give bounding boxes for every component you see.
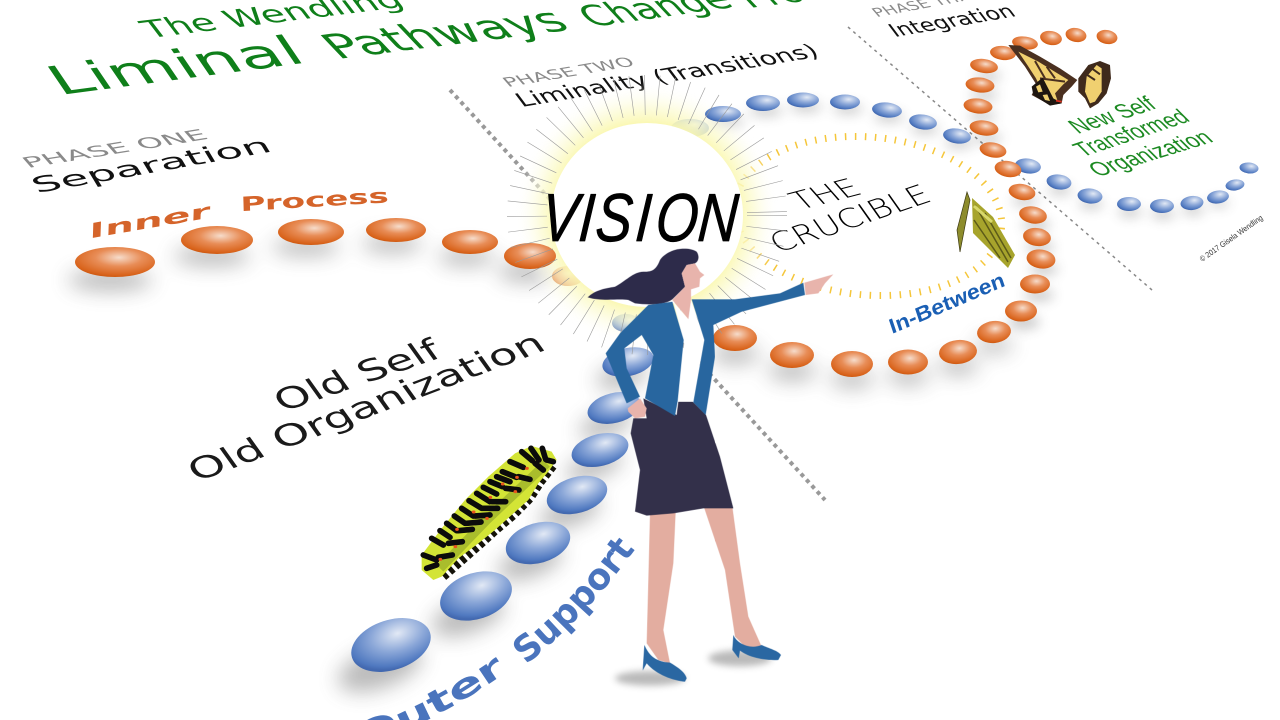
title — [36, 0, 894, 104]
title word: Pathways: Pathways — [310, 0, 579, 67]
crucible: CRUCIBLE — [762, 178, 937, 259]
phase one name: Separation — [26, 132, 276, 198]
beads showing through the rays — [504, 106, 741, 269]
process: Process — [237, 185, 393, 216]
title word: Liminal: Liminal — [36, 27, 314, 104]
phase two label: PHASE TWO — [499, 54, 639, 90]
sun glow — [515, 83, 779, 347]
icon: chrysalis — [957, 192, 1015, 268]
new self: New Self — [1062, 92, 1162, 138]
blouse — [673, 300, 704, 402]
orange bead pathway: inner process — [75, 26, 1119, 377]
vision word: VISION — [539, 180, 741, 256]
label: inner process — [86, 185, 393, 243]
phase three name: Integration — [884, 1, 1020, 41]
head and neck — [672, 263, 704, 320]
label: outer support — [367, 538, 635, 720]
transformed: Transformed — [1067, 105, 1195, 161]
shoes — [643, 635, 781, 682]
phase one label: PHASE ONE — [18, 127, 213, 172]
label: in-between: In-Between — [886, 268, 1008, 339]
phase two name: Liminality (Transitions) — [511, 41, 824, 112]
phase one heading — [18, 127, 276, 198]
blue bead pathway: outer support — [344, 92, 1259, 681]
old self: Old Self — [265, 331, 450, 418]
skirt — [631, 398, 733, 516]
pointing hand — [804, 274, 833, 295]
label: old self old organization — [179, 325, 552, 488]
figure: woman pointing — [588, 249, 833, 686]
label: new self transformed organization — [1062, 92, 1218, 181]
label: the crucible — [762, 173, 937, 259]
inner: Inner — [86, 199, 218, 243]
phase divider lines — [450, 27, 1152, 500]
icon: caterpillar — [422, 446, 557, 580]
sun disc — [551, 123, 743, 307]
bead shadows — [68, 71, 1229, 702]
hip hand — [628, 398, 647, 418]
vision sun — [504, 83, 779, 347]
figure shadows — [615, 650, 772, 686]
phase two heading — [499, 41, 824, 112]
sun rays — [527, 95, 767, 335]
jacket — [606, 283, 805, 416]
legs — [647, 507, 762, 663]
copyright: © 2017 Gisela Wendling — [1198, 213, 1265, 264]
word: support: Support — [514, 538, 635, 662]
hair — [588, 249, 698, 304]
divider: phase one to two — [450, 90, 825, 500]
phase three heading — [869, 0, 1020, 41]
divider: phase two to three — [848, 27, 1152, 290]
organization: Organization — [1082, 126, 1218, 181]
the crucible ring of yellow ticks — [728, 126, 1008, 306]
old organization: Old Organization — [179, 325, 552, 488]
icon: butterfly — [1008, 45, 1111, 108]
the: THE — [782, 173, 869, 216]
